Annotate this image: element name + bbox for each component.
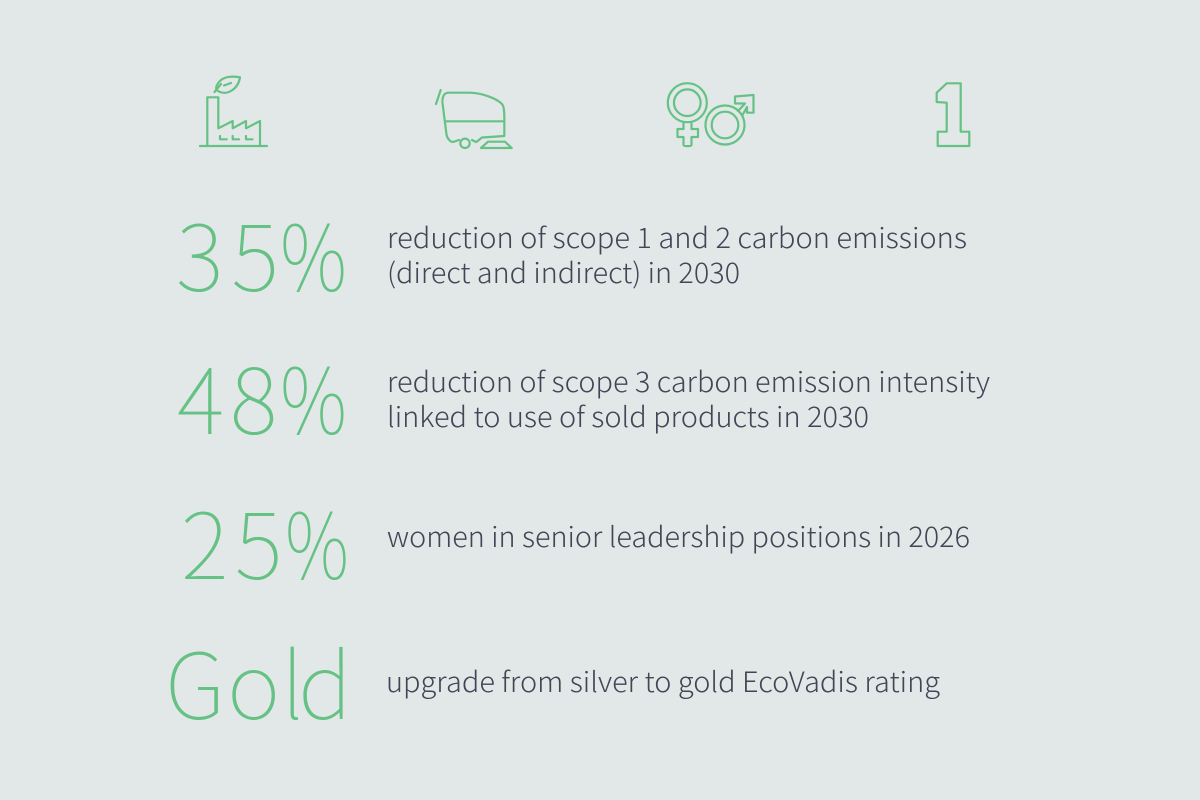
icon: number one	[937, 83, 969, 146]
stat value: 48%: %	[280, 329, 347, 461]
stat value: 35%: %	[280, 186, 347, 318]
stat value: 35%: 35	[176, 186, 279, 318]
stat value: 25%: 25	[181, 474, 282, 606]
stat value: Gold: Gold	[165, 614, 352, 746]
description: scope 3: reduction of scope 3 carbon emission intensity	[387, 361, 990, 401]
stat row: Gold	[165, 614, 940, 746]
icon: factory with leaf	[200, 77, 267, 146]
stat row: 35%	[176, 186, 967, 318]
stat value: 48%: 48	[177, 329, 277, 461]
description: EcoVadis rating: upgrade from silver to gold EcoVadis rating	[386, 661, 940, 701]
stat row: 25%	[181, 474, 970, 606]
description: scope 1 and 2: (direct and indirect) in 2030	[387, 252, 740, 292]
stat row: 48%	[177, 329, 990, 461]
stat value: 25%: %	[285, 474, 349, 606]
description: scope 1 and 2: reduction of scope 1 and 2 carbon emissions	[387, 217, 967, 257]
description: women in leadership: women in senior leadership positions in 2026	[387, 516, 970, 556]
description: scope 3: linked to use of sold products in 2030	[387, 396, 869, 436]
icon: female and male symbols	[668, 83, 754, 146]
icon: floor scrubber machine	[436, 90, 512, 148]
